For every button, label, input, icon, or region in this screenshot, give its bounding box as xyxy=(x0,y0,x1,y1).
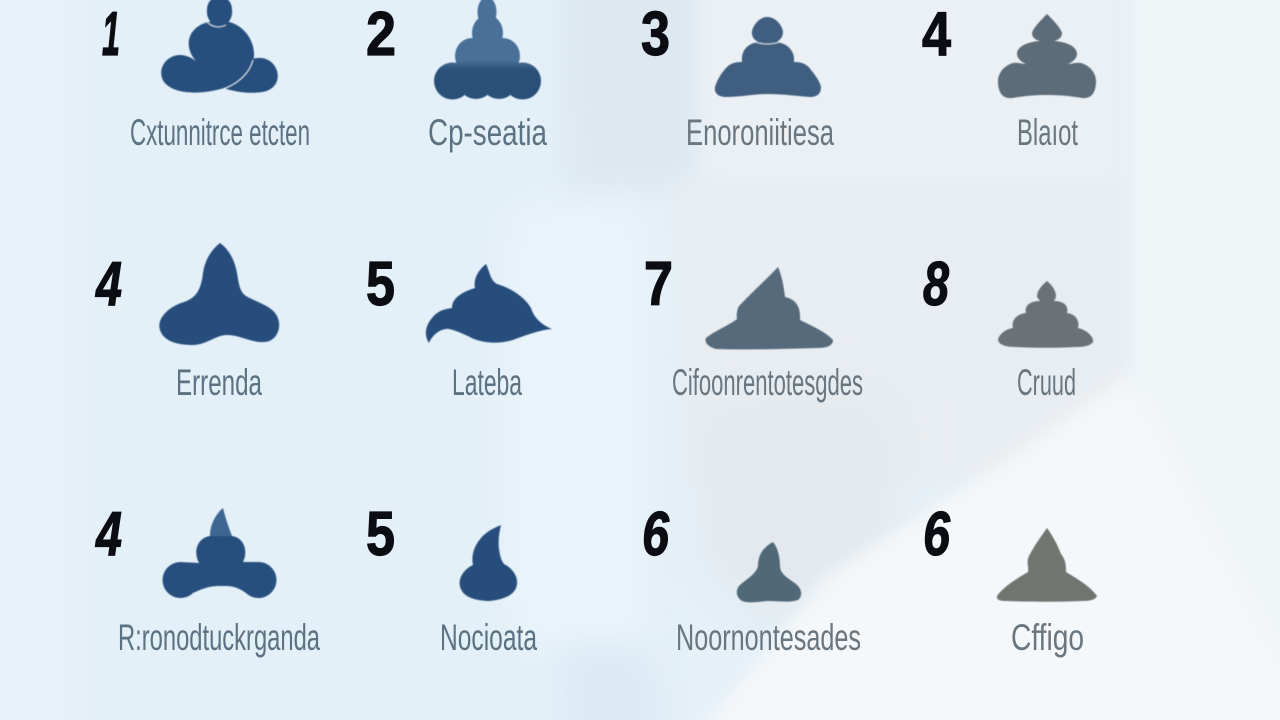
label 1: Cxtunnitrce etcten xyxy=(130,112,310,153)
labels row 3 xyxy=(118,617,1084,658)
icon: droplet swirl xyxy=(460,525,517,601)
labels row 2 xyxy=(176,362,1076,403)
label 5: Errenda xyxy=(176,362,262,403)
label 3: Enoroniitiesa xyxy=(686,112,834,153)
item 10 xyxy=(366,500,517,601)
number 5: 5 xyxy=(366,250,395,319)
number 5: 5 xyxy=(366,500,395,569)
item 3 xyxy=(641,0,821,97)
item 2 xyxy=(366,0,541,100)
label 4: Blaıot xyxy=(1017,112,1078,153)
label 12: Cffigo xyxy=(1011,617,1084,658)
item 12 xyxy=(923,500,1097,602)
icon: stacked mound 1 xyxy=(161,0,278,93)
item 7 xyxy=(644,250,833,349)
number 1: 1 xyxy=(102,0,120,69)
number 8: 8 xyxy=(923,250,949,319)
number 3: 3 xyxy=(641,0,670,69)
item 4 xyxy=(922,0,1096,98)
icon: three-tier mound 4 xyxy=(998,14,1096,98)
number 6: 6 xyxy=(923,500,950,569)
label 10: Nocioata xyxy=(440,617,537,658)
label 8: Cruud xyxy=(1017,362,1076,403)
label 2: Cp-seatia xyxy=(428,112,547,153)
item 9 xyxy=(94,500,276,598)
number 7: 7 xyxy=(644,250,673,319)
item 11 xyxy=(642,500,801,602)
item 8 xyxy=(923,250,1093,348)
number 4: 4 xyxy=(94,500,122,569)
icon: wide peak xyxy=(997,528,1097,602)
item 1 xyxy=(102,0,278,93)
item 6 xyxy=(366,250,552,343)
labels row 1 xyxy=(130,112,1078,153)
icon: scalloped stack 2 xyxy=(434,0,541,100)
icon: three-tier mound 3 xyxy=(715,17,821,97)
label 9: R:ronodtuckrganda xyxy=(118,617,320,658)
icon: peaked trefoil xyxy=(159,243,279,345)
icon: small peak xyxy=(737,542,801,602)
number 4: 4 xyxy=(922,0,951,69)
icon: peaked mound 7 xyxy=(705,267,833,349)
item 5 xyxy=(94,243,279,345)
number 2: 2 xyxy=(366,0,396,69)
label 6: Lateba xyxy=(452,362,522,403)
number 6: 6 xyxy=(642,500,669,569)
number 4: 4 xyxy=(94,250,122,319)
label 7: Cifoonrentotesgdes xyxy=(672,362,863,403)
icon: four-tier mound xyxy=(998,281,1093,348)
icon: finned wave shape xyxy=(426,264,552,343)
label 11: Noornontesades xyxy=(676,617,861,658)
icon: spiked trefoil xyxy=(163,508,276,598)
